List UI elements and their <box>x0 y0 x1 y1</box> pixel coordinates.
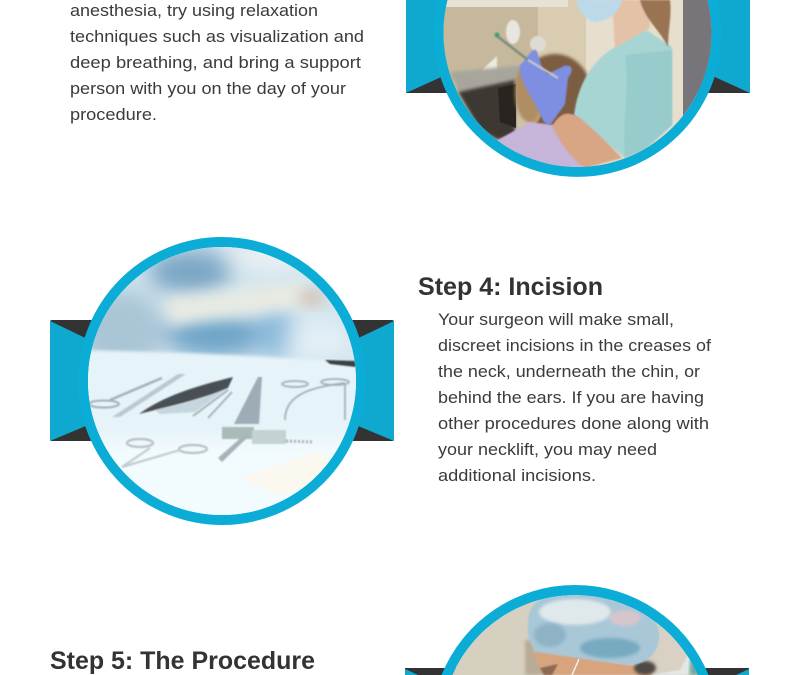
text block: step 3 anesthesia advice: person with you on the day of your <box>70 79 346 98</box>
ponytail <box>640 0 671 47</box>
photo: surgeon in hair cap <box>450 594 700 675</box>
text block: step 3 anesthesia advice: techniques such as visualization and <box>70 27 364 46</box>
photo: dentist giving injection <box>443 0 713 168</box>
arm <box>552 114 622 168</box>
ring: step 4 <box>83 242 361 520</box>
text block: step 4 incision description: additional incisions. <box>438 466 596 485</box>
text block: step 3 anesthesia advice: deep breathing, and bring a support <box>70 53 361 72</box>
instruments <box>89 374 350 495</box>
text block: step 4 incision description: Your surgeon will make small, <box>438 310 674 329</box>
text block: step 4 incision description: your necklift, you may need <box>438 440 657 459</box>
neck <box>612 0 650 48</box>
mask <box>576 0 622 22</box>
ring: step 3 <box>433 0 722 177</box>
heading: step 5: Step 5: The Procedure <box>50 647 315 675</box>
panel: step 4 instruments photo badge <box>50 242 394 530</box>
heading: step 4: Step 4: Incision <box>418 273 603 301</box>
ribbon: step 5 <box>405 668 749 675</box>
mask strap and visor <box>572 659 579 675</box>
patient head <box>536 52 588 126</box>
text block: step 3 anesthesia advice <box>70 1 364 124</box>
surgical cap <box>528 594 659 665</box>
ribbon: step 3 <box>406 0 750 93</box>
ribbon: step 4 <box>50 320 394 441</box>
text block: step 4 incision description: discreet incisions in the creases of <box>438 336 711 355</box>
panel: step 3 anesthesia photo badge <box>406 0 750 177</box>
panel: step 5 surgeon photo badge <box>405 585 749 675</box>
face <box>533 650 652 675</box>
glove <box>520 50 572 126</box>
syringe <box>494 32 558 78</box>
text block: step 3 anesthesia advice: anesthesia, try using relaxation <box>70 1 318 20</box>
text block: step 3 anesthesia advice: procedure. <box>70 105 157 124</box>
ring: step 5 <box>442 585 708 675</box>
text block: step 4 incision description <box>438 310 711 485</box>
photo: surgical instruments on a table <box>88 247 356 515</box>
patient gown <box>496 122 582 168</box>
text block: step 4 incision description: the neck, underneath the chin, or <box>438 362 700 381</box>
text block: step 4 incision description: other procedures done along with <box>438 414 709 433</box>
text block: step 4 incision description: behind the ears. If you are having <box>438 388 704 407</box>
scrubs <box>574 29 672 158</box>
